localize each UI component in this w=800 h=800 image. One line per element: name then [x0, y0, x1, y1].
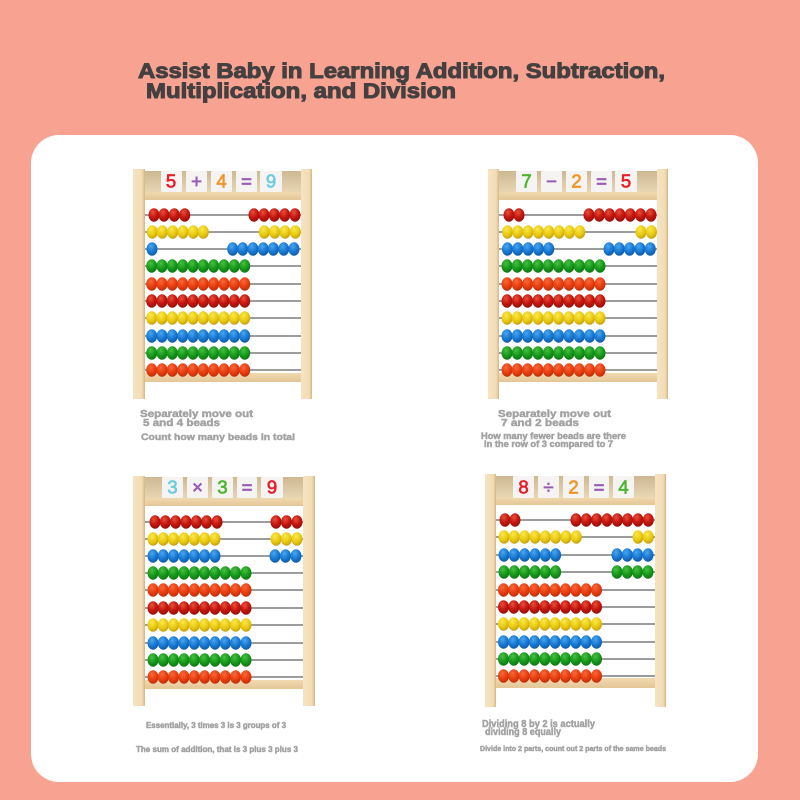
title: Assist Baby in Learning Addition, Subtraction, [138, 60, 665, 83]
caption: in the row of 3 compared to 7 [484, 439, 613, 449]
caption: 5 and 4 beads [143, 417, 220, 429]
caption: Separately move out [140, 408, 254, 420]
title [138, 60, 665, 103]
equation tiles: 8 / 2 = 4: 2 [568, 476, 579, 498]
equation tiles: 7 - 2 = 5: 2 [571, 170, 582, 192]
equation tiles: 5 + 4 = 9: 5 [166, 170, 176, 192]
abacus frame [485, 474, 666, 707]
caption: Count how many beads in total [141, 432, 295, 443]
equation tiles: 7 - 2 = 5: − [546, 170, 557, 192]
caption: Separately move out [498, 408, 612, 420]
equation tiles: 7 - 2 = 5: = [596, 170, 607, 192]
caption: 7 and 2 beads [501, 417, 579, 429]
beads [502, 208, 657, 377]
abacus frame [488, 169, 668, 399]
caption: How many fewer beads are there [481, 431, 626, 441]
equation tiles: 7 - 2 = 5: 7 [521, 170, 532, 192]
caption [136, 721, 299, 754]
beads [148, 515, 302, 684]
abacus frame [133, 476, 315, 706]
equation tiles: 8 / 2 = 4: 4 [618, 476, 629, 498]
beads [498, 513, 654, 683]
equation tiles: 5 + 4 = 9: + [191, 170, 202, 192]
equation tiles: 5 + 4 = 9: 4 [216, 170, 227, 192]
panel: addition abacus [133, 169, 312, 443]
caption: The sum of addition, that is 3 plus 3 plus 3 [136, 745, 299, 754]
equation tiles: 7 - 2 = 5 [516, 170, 637, 192]
caption: Essentially, 3 times 3 is 3 groups of 3 [146, 721, 287, 730]
equation tiles: 8 / 2 = 4: ÷ [543, 476, 554, 498]
panel: multiplication abacus [133, 476, 315, 754]
equation tiles: 8 / 2 = 4: 8 [518, 476, 529, 498]
caption: Dividing 8 by 2 is actually [482, 719, 595, 730]
caption [140, 408, 295, 443]
equation tiles: 8 / 2 = 4: = [594, 476, 604, 498]
equation tiles: 3 x 3 = 9 [162, 476, 283, 498]
equation tiles: 8 / 2 = 4 [513, 476, 634, 498]
caption [481, 408, 626, 449]
equation tiles: 5 + 4 = 9: 9 [266, 170, 276, 192]
equation tiles: 5 + 4 = 9 [161, 170, 282, 192]
caption: Divide into 2 parts, count out 2 parts of the same beads [480, 744, 666, 753]
equation tiles: 3 x 3 = 9: 3 [217, 476, 228, 498]
caption [480, 719, 666, 753]
abacus frame [133, 169, 312, 399]
equation tiles: 3 x 3 = 9: = [242, 476, 252, 498]
equation tiles: 5 + 4 = 9: = [241, 170, 252, 192]
equation tiles: 3 x 3 = 9: 3 [167, 476, 178, 498]
equation tiles: 3 x 3 = 9: 9 [267, 476, 277, 498]
beads [146, 208, 301, 377]
equation tiles: 3 x 3 = 9: × [192, 476, 203, 498]
title: Multiplication, and Division [146, 80, 456, 103]
caption: dividing 8 equally [485, 727, 561, 738]
panel: white card [31, 135, 758, 782]
panel: subtraction abacus [481, 169, 668, 449]
panel: division abacus [480, 474, 666, 753]
equation tiles: 7 - 2 = 5: 5 [621, 170, 631, 192]
